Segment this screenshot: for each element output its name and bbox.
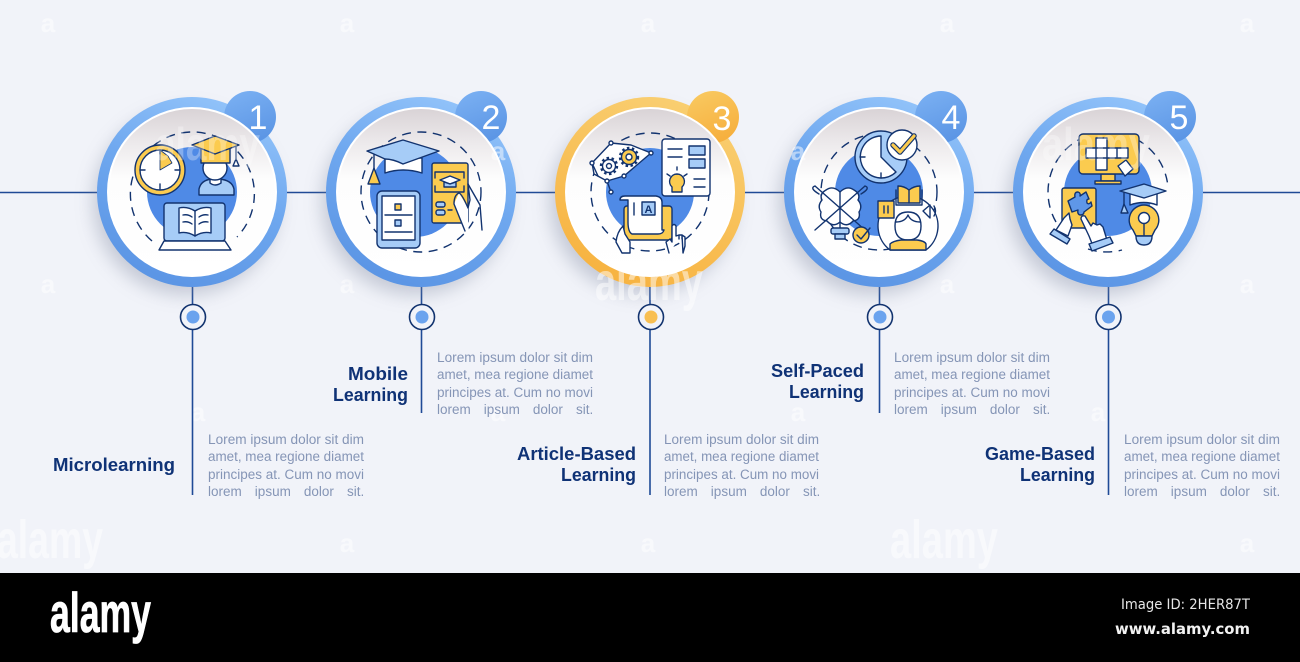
badge 3 <box>687 91 739 143</box>
description 4: amet, mea regione diamet <box>894 367 1050 382</box>
watermarks <box>0 118 1150 570</box>
icon: microlearning <box>130 132 254 250</box>
inner disc 4 <box>794 107 964 277</box>
background watermark marks: a <box>940 269 955 299</box>
watermarks: alamy <box>595 252 703 312</box>
description 1: amet, mea regione diamet <box>208 449 364 464</box>
background watermark marks: a <box>1240 269 1255 299</box>
description 3: Lorem ipsum dolor sit dim <box>664 432 819 447</box>
connector line 1 <box>192 285 194 495</box>
watermarks: a <box>491 136 506 166</box>
footer logo: alamy <box>50 581 151 644</box>
dot marker 2 <box>410 304 434 330</box>
description 3: amet, mea regione diamet <box>664 449 819 464</box>
description 2: lorem ipsum dolor sit. <box>437 402 593 417</box>
background watermark marks: a <box>641 528 656 558</box>
connector line 2 <box>420 285 422 413</box>
background watermark marks: a <box>1240 528 1255 558</box>
clock <box>135 145 185 195</box>
brain with gears <box>590 141 653 194</box>
brain with bulb <box>813 186 870 243</box>
ring 1 <box>97 97 287 287</box>
website: www.alamy.com <box>1115 620 1250 638</box>
background watermark marks: a <box>940 8 955 38</box>
badge 4: 4 <box>942 99 960 137</box>
background watermark marks: a <box>41 8 56 38</box>
description 2 <box>437 350 593 417</box>
description 4 <box>894 350 1050 417</box>
background watermark marks: a <box>791 397 806 427</box>
watermarks: alamy <box>0 510 103 570</box>
footer bar <box>0 573 1300 662</box>
connector line 3 <box>649 285 651 495</box>
graduate <box>192 136 239 195</box>
badge 2: 2 <box>482 99 500 137</box>
title 4: Learning <box>789 381 864 402</box>
title 5 <box>985 443 1095 485</box>
hands <box>616 224 685 253</box>
watermarks: alamy <box>890 510 998 570</box>
description 5: principes at. Cum no movi <box>1124 467 1280 482</box>
step 2: Mobile Learning <box>322 91 593 417</box>
background watermark marks: a <box>1091 397 1106 427</box>
title 3: Article-Based <box>517 443 636 464</box>
graduation cap <box>367 140 439 184</box>
description 5: amet, mea regione diamet <box>1124 449 1280 464</box>
watermarks: a <box>791 136 806 166</box>
background watermark marks: a <box>1240 8 1255 38</box>
connector line 5 <box>1108 285 1110 495</box>
step 3: Article-Based Learning <box>517 91 820 499</box>
background watermark marks: a <box>340 528 355 558</box>
description 4: principes at. Cum no movi <box>894 385 1050 400</box>
step 1: Microlearning <box>53 91 364 499</box>
shadow 3 <box>550 109 736 295</box>
step 5: Game-Based Learning <box>985 91 1280 499</box>
description 1 <box>208 432 364 499</box>
background watermark marks: a <box>41 269 56 299</box>
image id: Image ID: 2HER87T <box>1121 597 1250 613</box>
ring 4 <box>784 97 974 287</box>
tablet <box>377 191 420 248</box>
dot marker 5 <box>1096 304 1121 330</box>
badge 1 <box>224 91 276 143</box>
cap and bulb <box>1120 184 1166 245</box>
background watermark marks: a <box>191 397 206 427</box>
description 2: principes at. Cum no movi <box>437 385 593 400</box>
connector line 4 <box>878 285 880 413</box>
phone in hand <box>432 163 482 231</box>
title 4: Self-Paced <box>771 360 864 381</box>
description 3 <box>664 432 820 499</box>
shadow 1 <box>93 109 279 295</box>
badge 5: 5 <box>1170 99 1188 137</box>
dot marker 3 <box>638 304 664 330</box>
description 1: Lorem ipsum dolor sit dim <box>208 432 364 447</box>
icon: mobile learning <box>361 132 482 252</box>
title 5: Game-Based <box>985 443 1095 464</box>
shadow 2 <box>322 109 508 295</box>
title 4 <box>771 360 864 402</box>
badge 3: 3 <box>713 100 731 138</box>
tablet with puzzle and hands <box>1050 188 1113 251</box>
badge 5 <box>1144 91 1196 143</box>
inner disc 1 <box>107 107 277 277</box>
title 2: Learning <box>333 384 408 405</box>
document with bulb <box>662 139 710 196</box>
timeline horizontal line <box>0 192 1300 194</box>
inner disc 5 <box>1023 107 1193 277</box>
watermarks: alamy <box>155 118 260 170</box>
description 3: principes at. Cum no movi <box>664 467 819 482</box>
inner disc 2 <box>336 107 506 277</box>
description 5: lorem ipsum dolor sit. <box>1124 484 1280 499</box>
description 5: Lorem ipsum dolor sit dim <box>1124 432 1280 447</box>
ring 5 <box>1013 97 1203 287</box>
description 1: principes at. Cum no movi <box>208 467 364 482</box>
background watermark marks: a <box>491 397 506 427</box>
background watermark marks: a <box>340 269 355 299</box>
monitor with crossword <box>1079 134 1139 184</box>
watermarks: alamy <box>1042 118 1150 170</box>
title 1: Microlearning <box>53 454 175 475</box>
person with book <box>878 186 938 250</box>
shadow 5 <box>1008 109 1194 295</box>
description 1: lorem ipsum dolor sit. <box>208 484 364 499</box>
description 4: lorem ipsum dolor sit. <box>894 402 1050 417</box>
description 3: lorem ipsum dolor sit. <box>664 484 820 499</box>
badge 4 <box>915 91 967 143</box>
background watermark marks: a <box>340 8 355 38</box>
description 5 <box>1124 432 1280 499</box>
background watermark marks: a <box>641 8 656 38</box>
description 2: Lorem ipsum dolor sit dim <box>437 350 593 365</box>
description 2: amet, mea regione diamet <box>437 367 593 382</box>
badge 1: 1 <box>249 99 267 137</box>
ring 2 <box>326 97 516 287</box>
title 5: Learning <box>1020 464 1095 485</box>
inner disc 3 <box>565 107 735 277</box>
dot marker 1 <box>180 304 206 330</box>
description 4: Lorem ipsum dolor sit dim <box>894 350 1050 365</box>
title 3 <box>517 443 636 485</box>
title 2 <box>333 363 408 405</box>
step 4: Self-Paced Learning <box>771 91 1050 417</box>
icon: self-paced learning <box>813 130 938 250</box>
badge 2 <box>455 91 507 143</box>
shadow 4 <box>779 109 965 295</box>
icon: game-based learning <box>1048 134 1168 252</box>
title 3: Learning <box>561 464 636 485</box>
dot marker 4 <box>868 304 892 330</box>
ring 3 <box>555 97 745 287</box>
background watermark marks <box>41 8 1255 558</box>
icon: article-based learning <box>590 133 710 253</box>
clock with check <box>855 130 917 183</box>
folder and scroll: A <box>645 204 653 216</box>
laptop <box>159 203 231 250</box>
title 2: Mobile <box>348 363 408 384</box>
